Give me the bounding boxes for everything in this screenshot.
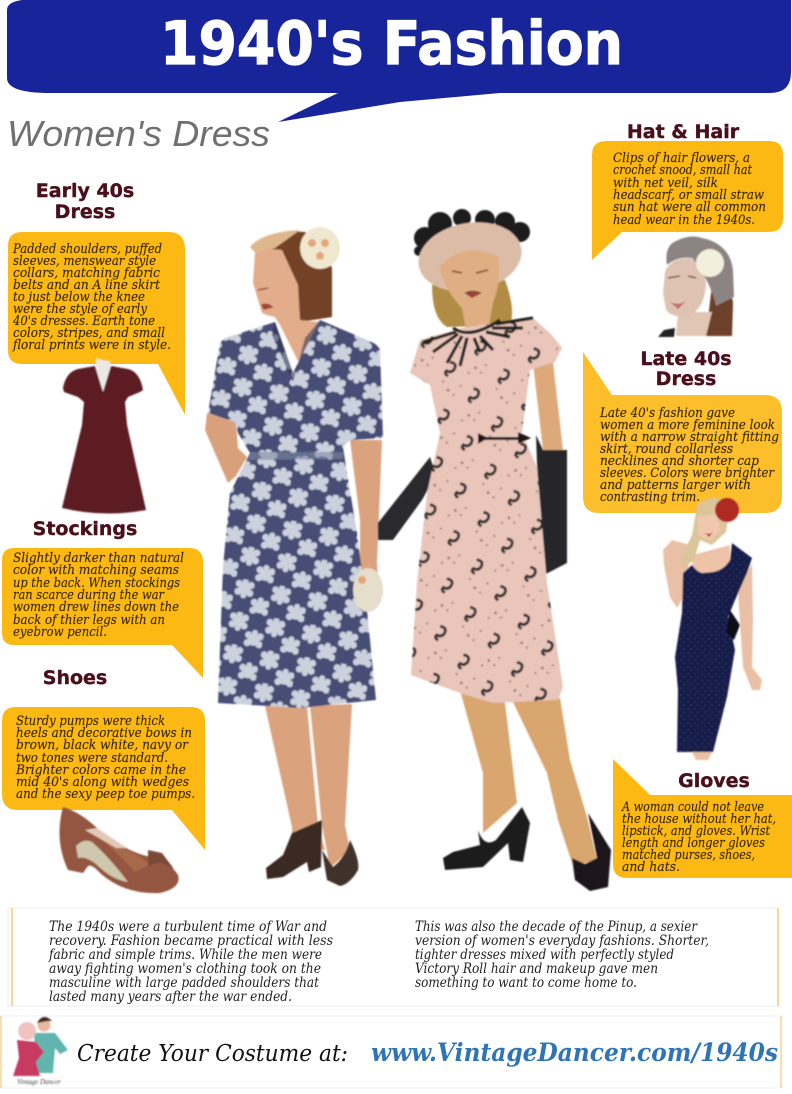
panel: gloves [613,759,792,878]
callout text: sleeves. Colors were brighter [600,466,775,481]
right arm [533,362,563,450]
title banner [7,0,791,122]
left paragraph [48,919,333,1005]
callout text: floral prints were in style. [12,338,171,353]
right paragraph: something to want to come home to. [415,975,637,991]
callout text: colors, stripes, and small [13,326,165,341]
heading: Shoes [43,667,107,689]
callout text: were the style of early [13,302,148,317]
panel: shoes [2,667,205,893]
heading: Dress [55,201,115,223]
icon: dancing couple logo: Vintage Dancer [17,1078,61,1086]
callout text: back of thier legs with an [13,613,165,628]
heading [36,180,134,223]
dress [208,320,383,708]
callout text: ran scarce during the war [13,588,165,603]
callout text: A woman could not leave [621,800,764,815]
callout [2,548,203,678]
callout text: mid 40's along with wedges [16,775,189,790]
right shoe [572,813,611,891]
heading [640,348,732,390]
hair [256,232,332,322]
face and neck [439,250,499,330]
callout text: color with matching seams [13,563,179,578]
callout text: with net veil, silk [613,176,718,191]
callout text [599,406,779,505]
callout text: matched purses, shoes, [622,848,755,863]
icon: pinup in navy dress [663,498,762,760]
callout text: skirt, round collarless [600,442,733,457]
left glove [378,457,436,540]
callout text: 40's dresses. Earth tone [12,314,155,329]
right paragraph: tighter dresses mixed with perfectly styled [415,947,674,963]
legs [265,704,352,868]
heading: Dress [656,368,716,390]
left shoe [443,807,530,870]
callout text [13,551,184,640]
callout text: necklines and shorter cap [600,454,760,469]
callout text: women drew lines down the [13,600,179,615]
callout [2,707,205,850]
callout [583,352,782,513]
panel: stockings [2,518,203,678]
callout text: sun hat were all common [613,200,766,215]
call to action text: Create Your Costume at: [77,1041,348,1067]
right paragraph: version of women's everyday fashions. Shorter, [415,933,709,949]
title: 1940's Fashion [160,9,623,79]
callout text: Padded shoulders, puffed [12,242,162,257]
callout text: collars, matching fabric [13,266,161,281]
hair [432,280,512,327]
panel: late 40s dress [583,348,782,760]
callout [8,232,185,415]
panel: hat and hair [592,121,783,337]
belt arrow [478,432,531,444]
callout text: heels and decorative bows in [16,726,192,741]
callout text: and hats. [622,860,680,875]
hat brim [413,214,527,300]
icon: brown shoe [59,807,179,893]
callout text: headscarf, or small straw [613,188,764,203]
callout text: contrasting trim. [600,490,700,505]
right paragraph: Victory Roll hair and makeup gave men [415,961,658,977]
right paragraph [415,919,709,991]
left paragraph: masculine with large padded shoulders that [49,975,320,991]
heading: Stockings [33,518,137,540]
hat plume [414,209,530,256]
callout text: Sturdy pumps were thick [16,714,165,729]
dress [410,318,563,703]
callout text: length and longer gloves [622,836,765,851]
callout [613,759,792,878]
left arm [205,413,247,483]
bouquet [353,568,383,612]
callout text: and the sexy peep toe pumps. [16,787,195,802]
heading: Hat & Hair [627,121,740,143]
callout [592,141,783,260]
callout text: lipstick, and gloves. Wrist [622,824,771,839]
right arm [350,440,382,580]
callout text [613,151,766,228]
callout text: and patterns larger with [600,478,751,493]
left paragraph: lasted many years after the war ended. [49,989,292,1005]
left paragraph: away fighting women's clothing took on the [49,961,321,977]
left paragraph: recovery. Fashion became practical with less [49,933,333,949]
right paragraph: This was also the decade of the Pinup, a sexier [415,919,698,935]
callout text: Slightly darker than natural [13,551,184,566]
callout text [15,714,195,802]
left shoe [266,820,322,879]
call to action panel [0,1016,782,1088]
icon: dancing couple logo [13,1017,68,1086]
heading: Gloves [678,770,750,792]
callout text [621,800,776,875]
callout text: women a more feminine look [600,418,775,433]
callout text: belts and an A line skirt [13,278,161,293]
callout text: eyebrow pencil. [13,625,107,640]
face and neck [253,249,320,365]
callout text: head wear in the 1940s. [613,213,755,228]
collar rays [423,318,533,366]
callout text: Brighter colors came in the [15,763,186,778]
heading: Late 40s [640,348,732,370]
panel: early 40s dress [8,180,185,514]
intro text panel [8,908,778,1006]
callout text: Clips of hair flowers, a [613,151,750,166]
flower [300,227,340,269]
callout text: the house without her hat, [622,812,776,827]
callout text: to just below the knee [13,290,145,305]
callout text: Late 40's fashion gave [599,406,735,421]
left paragraph: fabric and simple trims. While the men were [48,947,322,963]
callout text [12,242,171,353]
callout text: sleeves, menswear style [13,254,156,269]
left paragraph: The 1940s were a turbulent time of War and [49,919,327,935]
callout text: up the back. When stockings [13,576,180,591]
icon: woman with netted hat [658,237,734,337]
icon: burgundy dress [62,358,146,514]
right glove [535,435,567,577]
illustration: woman in blue floral dress [205,227,383,886]
callout text: brown, black white, navy or [16,738,189,753]
illustration: woman in pink dress with black gloves [378,209,611,891]
subtitle: Women's Dress [7,113,270,154]
callout text: crochet snood, small hat [613,163,753,178]
legs [460,690,597,866]
belt [248,452,343,460]
right shoe [322,840,358,886]
heading: Early 40s [36,180,134,202]
callout text: with a narrow straight fitting [600,430,779,445]
callout text: two tones were standard. [16,751,168,766]
